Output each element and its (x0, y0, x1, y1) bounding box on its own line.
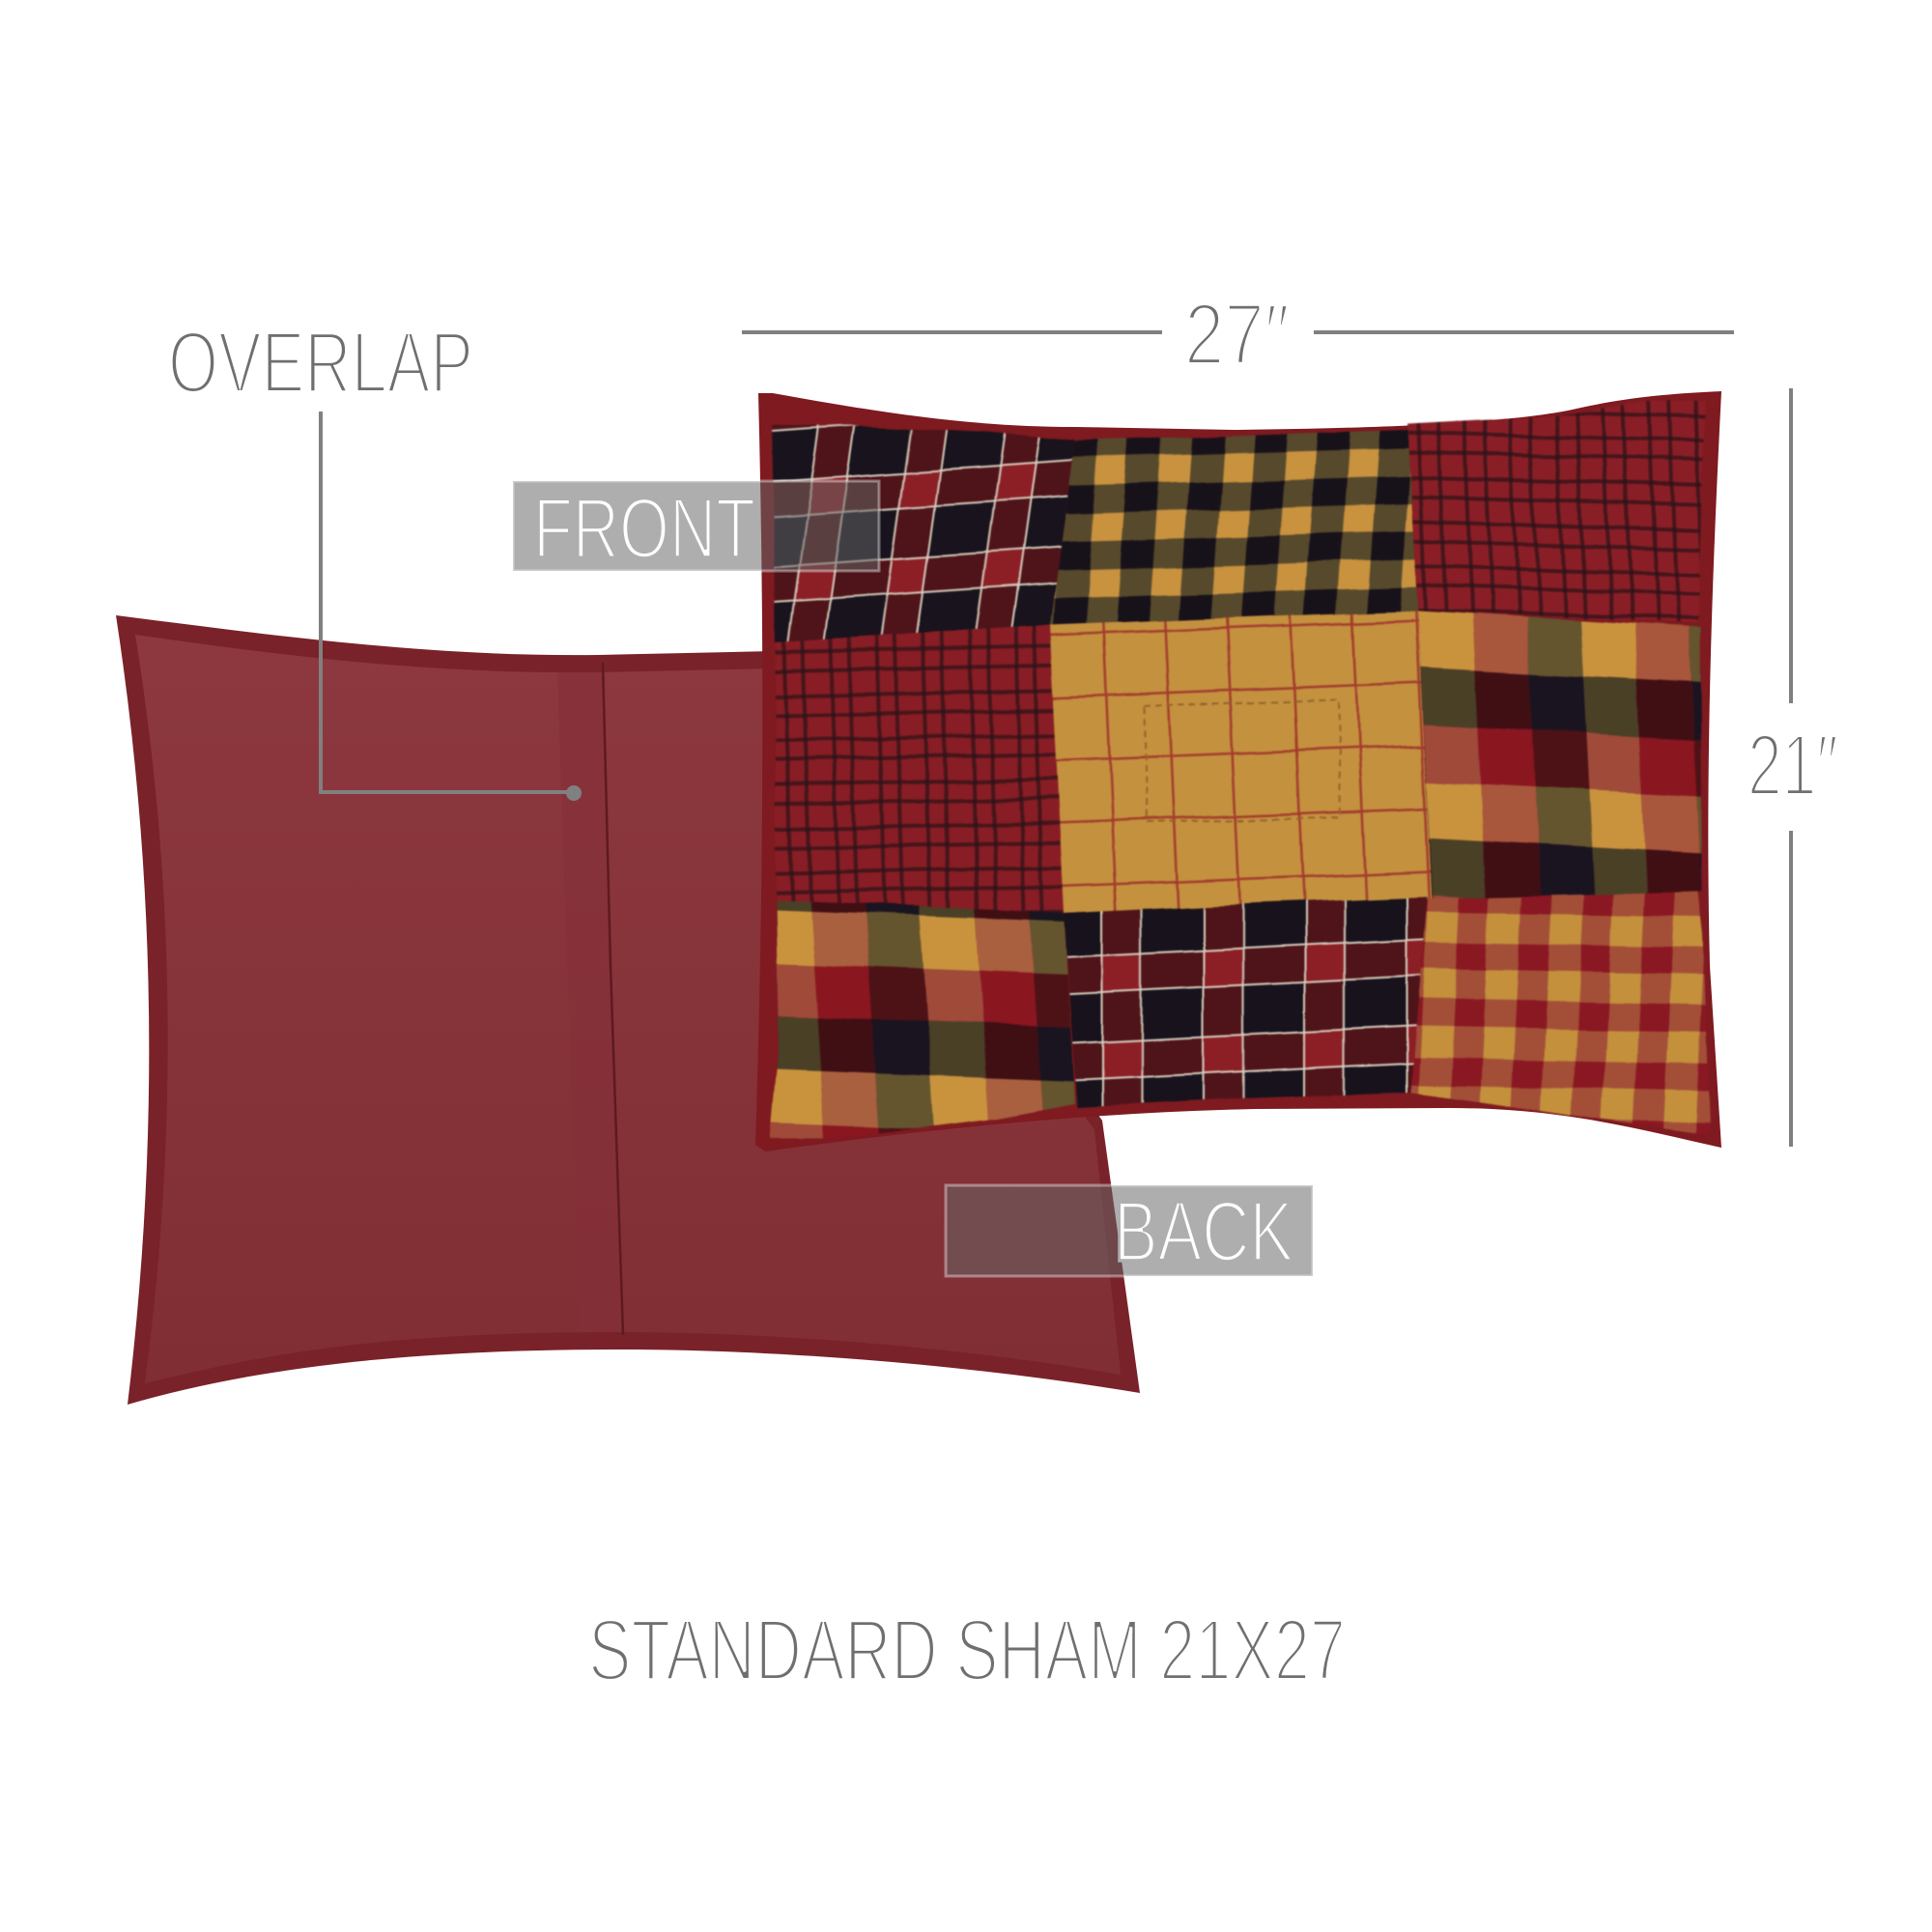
overlap flap band (557, 672, 623, 1332)
label: BACK (946, 1183, 1313, 1279)
patchwork blocks (770, 400, 1710, 1137)
front sham binding (755, 391, 1721, 1151)
panel: front patchwork sham (755, 391, 1721, 1151)
callout: OVERLAP (168, 315, 582, 801)
block: large buffalo plaid bottom left (770, 900, 1075, 1137)
back sham flange (116, 615, 1140, 1405)
panel: back sham (116, 615, 1140, 1405)
block: gold windowpane centre (1050, 611, 1432, 913)
block: navy and wine windowpane plaid (771, 425, 1075, 641)
dimension: width 27 inches: 27″ (1184, 287, 1290, 384)
back sham inner panel (135, 635, 1121, 1383)
label: BACK: BACK (1114, 1183, 1293, 1279)
centre quilting stitches (1144, 700, 1340, 823)
callout: OVERLAP: OVERLAP (168, 315, 473, 412)
block: fine red plaid middle left (776, 625, 1065, 913)
block: black and gold check (1050, 430, 1418, 625)
block: large buffalo plaid middle right (1418, 611, 1702, 898)
block: red and gold check (1410, 892, 1710, 1133)
block: fine red plaid top right (1407, 400, 1705, 624)
dimension: height 21 inches: 21″ (1747, 718, 1838, 814)
caption: product size: STANDARD SHAM 21X27 (588, 1603, 1346, 1699)
label: FRONT: FRONT (533, 480, 755, 576)
overlap fold line (603, 663, 623, 1335)
block: navy and wine windowpane plaid bottom (1065, 896, 1427, 1107)
